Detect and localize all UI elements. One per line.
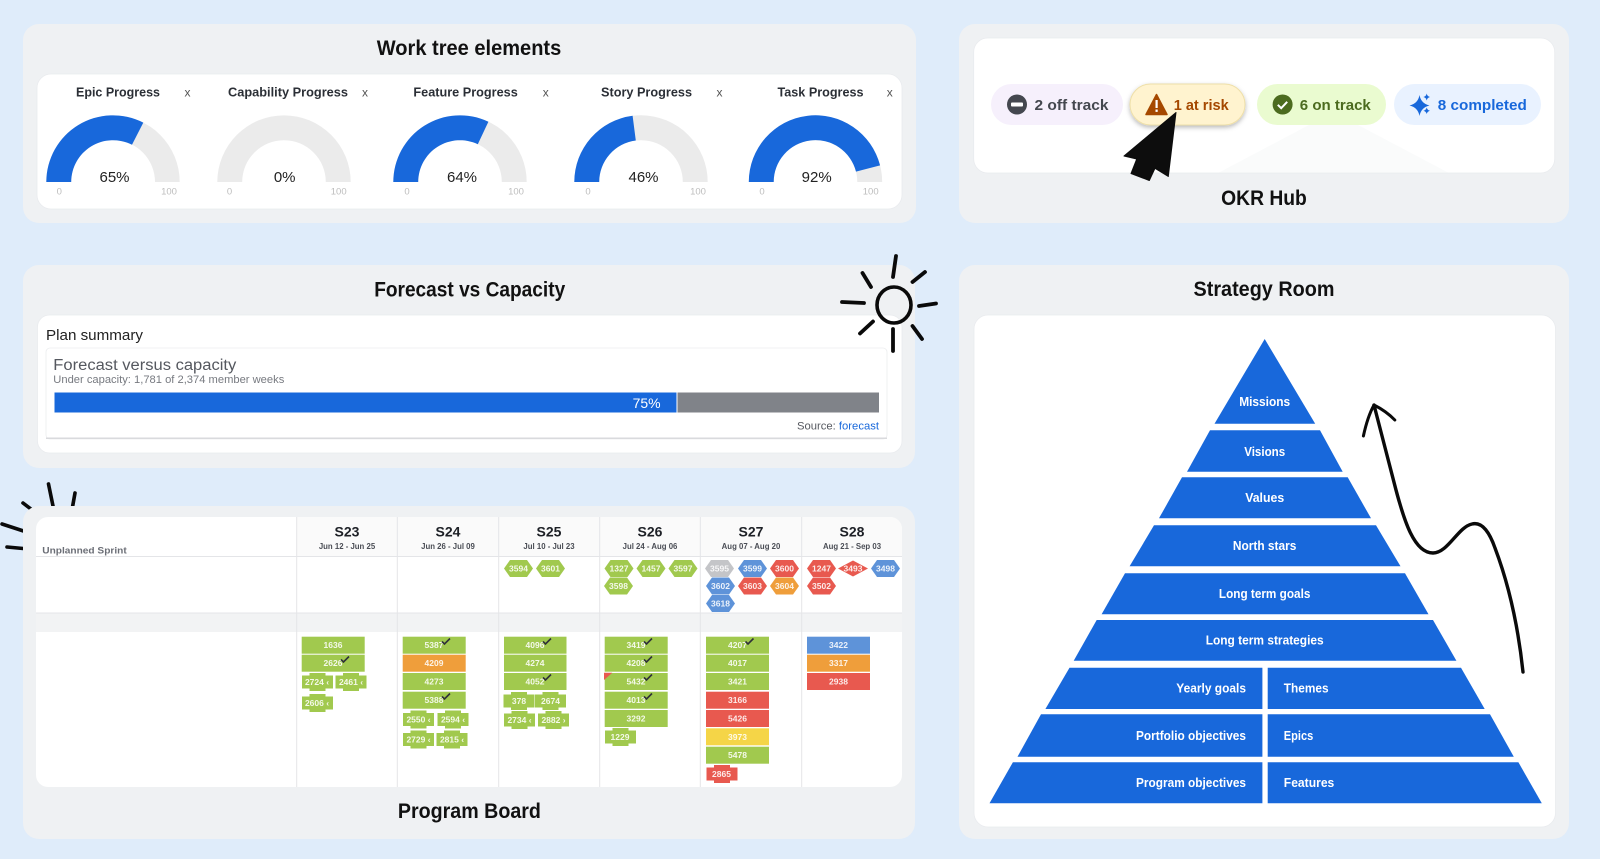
sprint S23: 2461 ‹ (339, 677, 363, 687)
board grid (36, 517, 902, 787)
sprint S25: 4052 (526, 676, 545, 686)
gauge: epic progress: 0 (57, 186, 62, 198)
gauge: capability progress (217, 84, 368, 198)
gauge: epic progress: x (184, 86, 190, 100)
status pill: on track: 6 on track (1300, 97, 1371, 114)
sprint S26 (604, 524, 698, 746)
status pill: completed (1394, 84, 1541, 125)
label: unplanned sprint: Unplanned Sprint (42, 546, 128, 556)
forecast inner card (46, 348, 887, 439)
tier: program objectives and features (990, 762, 1542, 803)
sprint S25: 4096 (526, 640, 545, 650)
sprint S27: Aug 07 - Aug 20 (722, 542, 781, 551)
gauge: epic progress (46, 84, 190, 198)
forecast inner card: Source: forecast (797, 420, 879, 432)
gauge: feature progress: Feature Progress (413, 84, 518, 100)
sprint S26: 3598 (609, 581, 628, 591)
sprint S24: 4273 (425, 676, 444, 686)
sprint S25: 4274 (526, 658, 545, 668)
sprint S25: 378 (512, 696, 526, 706)
sprint S27: 3602 (711, 581, 730, 591)
sprint S26: 3419 (627, 640, 646, 650)
heading: OKR hub: OKR Hub (1221, 187, 1307, 210)
gauge: feature progress: x (543, 86, 549, 100)
gauge: story progress (574, 84, 722, 198)
forecast inner card: Under capacity: 1,781 of 2,374 member weeks (53, 374, 285, 386)
gauge: story progress: 0 (585, 186, 591, 198)
sprint S27: 3166 (728, 695, 747, 705)
tier: missions: Missions (1239, 394, 1290, 409)
tier: yearly goals and themes (1045, 668, 1485, 709)
sprint S25: 3601 (541, 564, 560, 574)
sprint S25: 3594 (509, 564, 528, 574)
sprint S23: 2626 (324, 658, 343, 668)
tier: long term goals: Long term goals (1219, 586, 1310, 601)
sprint S28: 2938 (829, 676, 848, 686)
gauge: task progress: Task Progress (778, 84, 864, 100)
tier: portfolio objectives and epics: Epics (1284, 728, 1313, 743)
decoration: hand-drawn burst (2, 484, 75, 548)
gauge: capability progress: x (362, 86, 368, 100)
sprint S25: Jul 10 - Jul 23 (523, 542, 575, 551)
heading: program board: Program Board (398, 800, 541, 823)
sprint S28: 3317 (829, 658, 848, 668)
sprint S24: 4209 (425, 658, 444, 668)
sprint S24: S24 (436, 524, 461, 540)
tier: north stars: North stars (1233, 538, 1296, 553)
capacity bar: 75% (633, 395, 661, 411)
sprint S27: 3595 (710, 564, 729, 574)
sprint S27 (705, 524, 799, 783)
status pill: at risk: 1 at risk (1174, 97, 1229, 114)
gauge: story progress: x (716, 86, 722, 100)
pyramid chart (990, 339, 1542, 803)
plan summary card (38, 315, 902, 453)
sprint S26: 1327 (610, 564, 629, 574)
sprint S27: 3973 (728, 732, 747, 742)
icon: hand-drawn cursor arrow (1124, 112, 1176, 180)
gauge: task progress: 0 (759, 186, 765, 198)
sprint S28 (807, 524, 900, 690)
sprint S28: 3493 (844, 564, 863, 574)
sprint S27: 4207 (728, 640, 747, 650)
gauge: story progress: 100 (690, 186, 706, 198)
tier: values: Values (1245, 490, 1284, 505)
gauge: feature progress: 100 (508, 186, 524, 198)
tier: portfolio objectives and epics: Portfolio objectives (1136, 728, 1246, 743)
gauge: capability progress: 0% (274, 169, 296, 186)
tier: visions (1187, 430, 1343, 472)
sprint S23: Jun 12 - Jun 25 (319, 542, 376, 551)
panel: forecast vs capacity (23, 265, 915, 468)
gauge: epic progress: Epic Progress (76, 84, 160, 100)
tier: missions (1214, 339, 1315, 424)
sprint S26: 5432 (627, 676, 646, 686)
sprint S28: S28 (840, 524, 865, 540)
status pill: off track: 2 off track (1034, 97, 1109, 114)
gauge: task progress: x (887, 86, 893, 100)
sprint S28: 3502 (812, 581, 831, 591)
tier: north stars (1130, 525, 1400, 566)
tier: portfolio objectives and epics (1018, 714, 1514, 757)
sprint S26: 1229 (611, 732, 630, 742)
sprint S25: 2882 › (541, 715, 566, 725)
sprint S27: 3421 (728, 676, 747, 686)
gauge: task progress: 100 (863, 186, 879, 198)
gauge: capability progress: Capability Progress (228, 84, 348, 100)
gauge: feature progress: 0 (404, 186, 410, 198)
sprint S24 (403, 524, 476, 748)
heading: forecast vs capacity: Forecast vs Capacity (374, 278, 565, 302)
sprint S26: S26 (638, 524, 663, 540)
status pill: completed: 8 completed (1438, 97, 1527, 114)
sprint S23: 2724 ‹ (305, 677, 329, 687)
sprint S27: 2865 (712, 769, 731, 779)
arrow: hand-drawn upward squiggle (1363, 405, 1523, 672)
tier: visions: Visions (1244, 444, 1285, 459)
sprint S25: S25 (537, 524, 562, 540)
sprint S28: 1247 (812, 564, 831, 574)
sprint S25 (504, 524, 575, 729)
gauge: task progress: 92% (802, 169, 832, 186)
tier: program objectives and features: Program objectives (1136, 775, 1246, 790)
sprint S27: 3603 (743, 581, 762, 591)
sprint S26: 1457 (642, 564, 661, 574)
sprint S26: 3292 (627, 714, 646, 724)
tier: values (1159, 477, 1371, 518)
gauge: epic progress: 100 (161, 186, 177, 198)
sprint S27: 5426 (728, 714, 747, 724)
sprint S26: Jul 24 - Aug 06 (623, 542, 678, 551)
sprint S27: 3600 (775, 564, 794, 574)
gauge card (37, 74, 902, 209)
sprint S23: 2606 ‹ (305, 698, 329, 708)
sprint S27: 5478 (728, 750, 747, 760)
panel: strategy room (959, 265, 1569, 839)
sprint S27: 3618 (711, 598, 730, 608)
sprint S23: 1636 (324, 640, 343, 650)
sprint S25: 2674 (541, 696, 560, 706)
gauge: story progress: Story Progress (601, 84, 692, 100)
gauge: feature progress (393, 84, 549, 198)
tier: yearly goals and themes: Themes (1284, 680, 1329, 696)
status pill: off track (991, 84, 1123, 125)
panel: OKR hub (959, 24, 1569, 223)
capacity bar (54, 392, 879, 412)
decoration: hand-drawn sun (842, 256, 936, 351)
sprint S25: 2734 ‹ (507, 715, 532, 725)
sprint S23: S23 (335, 524, 360, 540)
gauge: capability progress: 0 (227, 186, 232, 198)
gauge: task progress (749, 84, 893, 198)
tier: program objectives and features: Features (1284, 775, 1334, 790)
sprint S26: 4013 (627, 695, 646, 705)
sprint S27: 3604 (775, 581, 794, 591)
heading: work tree elements: Work tree elements (377, 37, 561, 60)
sprint S24: 5387 (425, 640, 444, 650)
sprint S27: S27 (739, 524, 764, 540)
sprint S28: 3498 (876, 564, 895, 574)
sprint S26: 3597 (674, 564, 693, 574)
sprint S27: 4017 (728, 658, 747, 668)
sprint S24: 2815 ‹ (440, 734, 464, 744)
status pill: at risk (1130, 84, 1245, 125)
sprint S24: 2729 ‹ (406, 734, 431, 744)
sprint S28: Aug 21 - Sep 03 (823, 542, 882, 551)
sprint S24: 5388 (425, 695, 444, 705)
tier: long term goals (1102, 573, 1428, 614)
sprint S23 (302, 524, 376, 712)
gauge: capability progress: 100 (331, 186, 347, 198)
sprint S24: 2550 ‹ (406, 714, 431, 724)
forecast inner card: Forecast versus capacity (53, 357, 237, 374)
gauge: epic progress: 65% (99, 169, 130, 186)
tier: long term strategies: Long term strategies (1206, 632, 1324, 648)
panel: program board (23, 506, 915, 839)
text: plan summary: Plan summary (46, 327, 144, 344)
gauge: feature progress: 64% (447, 169, 477, 186)
tier: yearly goals and themes: Yearly goals (1176, 680, 1246, 696)
status pill: on track (1257, 84, 1386, 125)
sprint S24: Jun 26 - Jul 09 (421, 542, 476, 551)
heading: strategy room: Strategy Room (1194, 278, 1334, 301)
sprint S27: 3599 (743, 564, 762, 574)
sprint S28: 3422 (829, 640, 848, 650)
tier: long term strategies (1074, 620, 1456, 661)
panel: work tree elements (23, 24, 916, 223)
sprint S26: 4208 (627, 658, 646, 668)
sprint S24: 2594 ‹ (441, 714, 465, 724)
gauge: story progress: 46% (628, 169, 659, 186)
